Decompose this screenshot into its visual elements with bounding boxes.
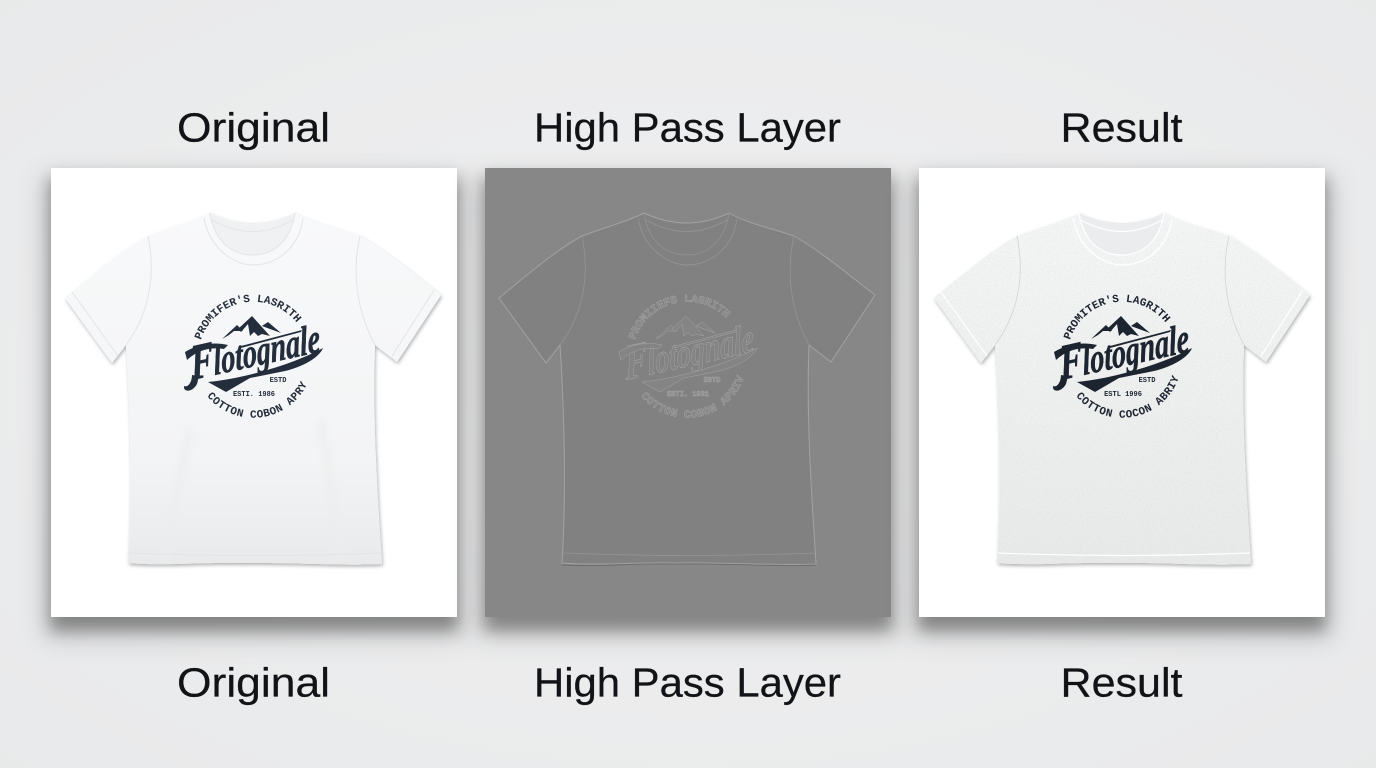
logo: Flotognale badge: ESTD bbox=[270, 377, 286, 385]
logo: embossed Flotognale badge bbox=[618, 294, 758, 418]
logo: Flotognale badge: COTTON COBON APRY bbox=[208, 380, 306, 418]
logo: sharpened Flotognale badge: ESTD bbox=[1139, 377, 1155, 385]
logo: sharpened Flotognale badge: COTTON COCON ABRIY bbox=[1077, 374, 1178, 418]
icon: sharpened textured t-shirt bbox=[934, 214, 1312, 569]
icon: white t-shirt bbox=[65, 213, 443, 569]
caption: Result (bottom): Result bbox=[1060, 660, 1183, 706]
logo: embossed Flotognale badge: COTTON COBON APRIV bbox=[642, 374, 744, 418]
logo: embossed Flotognale badge: ESTI. 1931 bbox=[667, 391, 709, 399]
caption: High Pass Layer (bottom): High Pass Layer bbox=[534, 660, 841, 706]
heading: High Pass Layer (top): High Pass Layer bbox=[534, 104, 841, 150]
logo: sharpened Flotognale badge bbox=[1052, 294, 1192, 418]
logo: sharpened Flotognale badge: Flotognale bbox=[1057, 306, 1191, 391]
icon: embossed grey t-shirt bbox=[498, 212, 876, 566]
panel: result bbox=[902, 164, 1343, 648]
logo: Flotognale badge: Flotognale bbox=[188, 306, 322, 391]
panel: high pass layer bbox=[468, 164, 909, 648]
logo: Flotognale badge bbox=[184, 294, 323, 418]
caption: Original (bottom): Original bbox=[177, 660, 330, 706]
heading: Result (top): Result bbox=[1060, 104, 1183, 150]
panel: original bbox=[33, 164, 475, 648]
heading: Original (top): Original bbox=[177, 104, 330, 150]
logo: Flotognale badge: ESTI. 1986 bbox=[233, 391, 275, 399]
logo: embossed Flotognale badge: ESTD bbox=[704, 377, 720, 385]
logo: sharpened Flotognale badge: PROMITER'S LAGRITH bbox=[1063, 294, 1171, 340]
logo: sharpened Flotognale badge: ESTL 1996 bbox=[1104, 391, 1142, 399]
logo: Flotognale badge: PROMIFER'S LASRITH bbox=[194, 294, 302, 340]
logo: embossed Flotognale badge: Flotognale bbox=[622, 306, 756, 391]
logo: embossed Flotognale badge: PROMIIEFS LAGRITH bbox=[628, 294, 731, 340]
